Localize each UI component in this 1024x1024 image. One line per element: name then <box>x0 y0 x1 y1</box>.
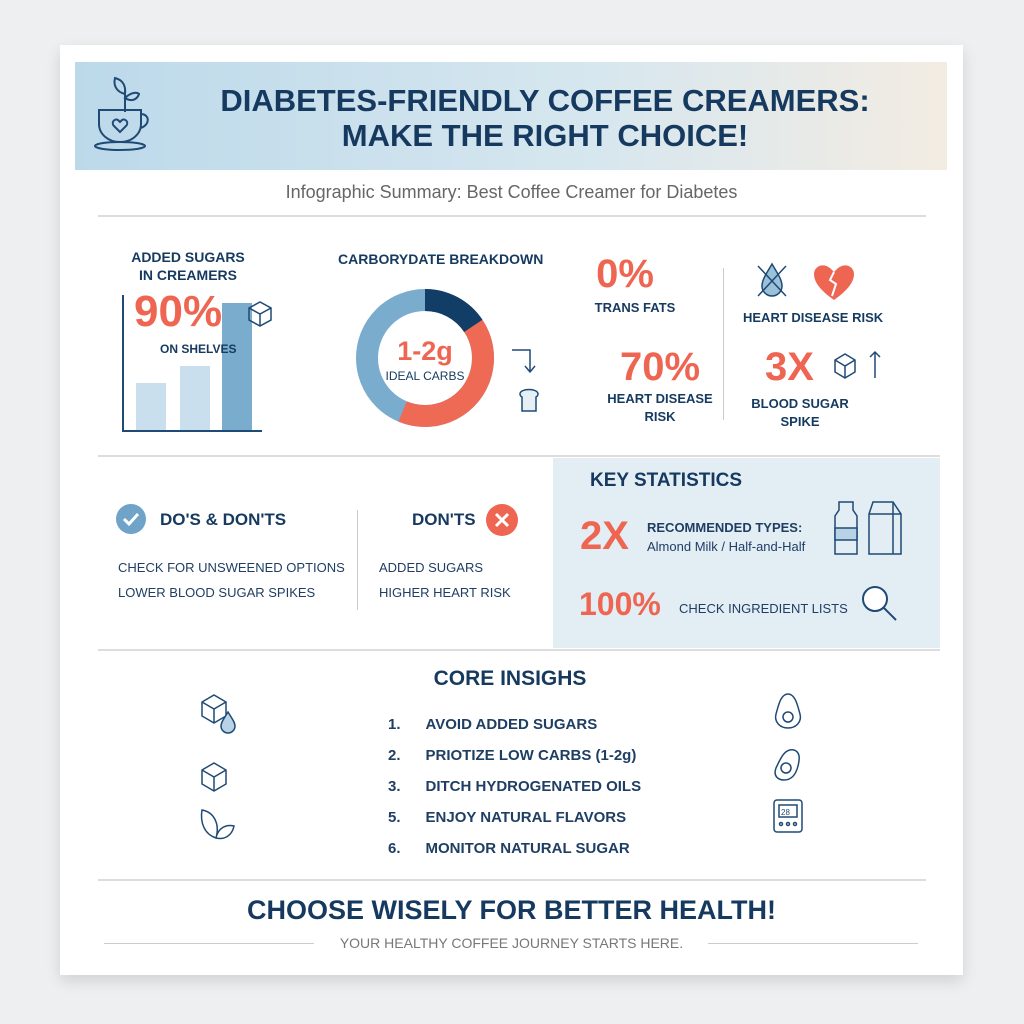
stat 70%: 70% <box>620 345 700 389</box>
icon: no drop and broken heart <box>758 262 854 300</box>
panel: carbohydrate donut <box>338 251 543 427</box>
title: DIABETES-FRIENDLY COFFEE CREAMERS: <box>220 83 870 118</box>
panel: risk stats: SPIKE <box>780 414 820 429</box>
heading: ADDED SUGARS <box>131 249 245 265</box>
stat 2X: 2X <box>580 514 629 558</box>
numbered list: 6. MONITOR NATURAL SUGAR <box>388 840 630 857</box>
footer heading: CHOOSE WISELY FOR BETTER HEALTH! <box>247 895 776 925</box>
icon: magnifier <box>862 586 897 621</box>
panel: do's and don'ts: ADDED SUGARS <box>379 560 483 575</box>
panel: do's and don'ts <box>116 504 518 610</box>
panel: risk stats: BLOOD SUGAR <box>751 396 849 411</box>
panel: key statistics: CHECK INGREDIENT LISTS <box>679 601 848 616</box>
heading: IN CREAMERS <box>139 267 237 283</box>
panel: core insights: CORE INSIGHS <box>434 667 586 690</box>
numbered list: 5. ENJOY NATURAL FLAVORS <box>388 809 626 826</box>
panel: risk stats: RISK <box>644 409 676 424</box>
panel: key statistics: KEY STATISTICS <box>590 470 742 491</box>
icons: right column: 28 <box>781 808 790 817</box>
panel: risk stats: TRANS FATS <box>595 300 675 315</box>
numbered list <box>388 716 641 857</box>
panel: do's and don'ts: DO'S & DON'TS <box>160 510 286 529</box>
panel: key statistics: Almond Milk / Half-and-Half <box>647 539 805 554</box>
numbered list: 1. AVOID ADDED SUGARS <box>388 716 597 733</box>
don'ts column: DON'TS <box>412 510 476 529</box>
header banner <box>75 62 947 170</box>
panel: core insights <box>200 667 803 857</box>
donut chart <box>356 289 494 427</box>
icon: coffee cup with plant <box>94 76 149 151</box>
panel: risk stats: HEART DISEASE RISK <box>743 310 883 325</box>
panel: risk stats <box>594 252 883 429</box>
numbered list: 3. DITCH HYDROGENATED OILS <box>388 778 641 795</box>
panel: key statistics <box>553 458 940 648</box>
heading <box>131 249 245 283</box>
title: MAKE THE RIGHT CHOICE! <box>342 118 748 153</box>
panel: carbohydrate donut: 1-2g <box>397 336 453 366</box>
panel: carbohydrate donut: IDEAL CARBS <box>386 369 464 383</box>
subtitle: Infographic Summary: Best Coffee Creamer for Diabetes <box>286 182 737 202</box>
icon: arrow and bread <box>512 349 539 412</box>
heading: CARBORYDATE BREAKDOWN <box>338 251 543 267</box>
panel: risk stats: HEART DISEASE <box>607 391 713 406</box>
panel: do's and don'ts: CHECK FOR UNSWEENED OPTIONS <box>118 560 345 575</box>
footer tagline: YOUR HEALTHY COFFEE JOURNEY STARTS HERE. <box>340 935 683 951</box>
icons: left column <box>200 694 236 840</box>
panel: do's and don'ts: LOWER BLOOD SUGAR SPIKES <box>118 585 315 600</box>
icons: right column <box>773 693 803 833</box>
stat 3X: 3X <box>765 345 814 389</box>
stat 100%: 100% <box>579 586 661 622</box>
panel: added sugars bar chart <box>122 249 272 432</box>
icon: check <box>116 504 146 534</box>
title <box>220 83 870 153</box>
numbered list: 2. PRIOTIZE LOW CARBS (1-2g) <box>388 747 636 764</box>
bar chart <box>122 295 272 432</box>
stat 90%: 90% <box>134 287 222 336</box>
panel: key statistics: RECOMMENDED TYPES: <box>647 520 802 535</box>
panel: do's and don'ts: HIGHER HEART RISK <box>379 585 511 600</box>
stat 0% trans fats: 0% <box>596 252 654 296</box>
panel: added sugars bar chart: ON SHELVES <box>160 342 236 356</box>
icon: milk cartons <box>834 501 902 555</box>
